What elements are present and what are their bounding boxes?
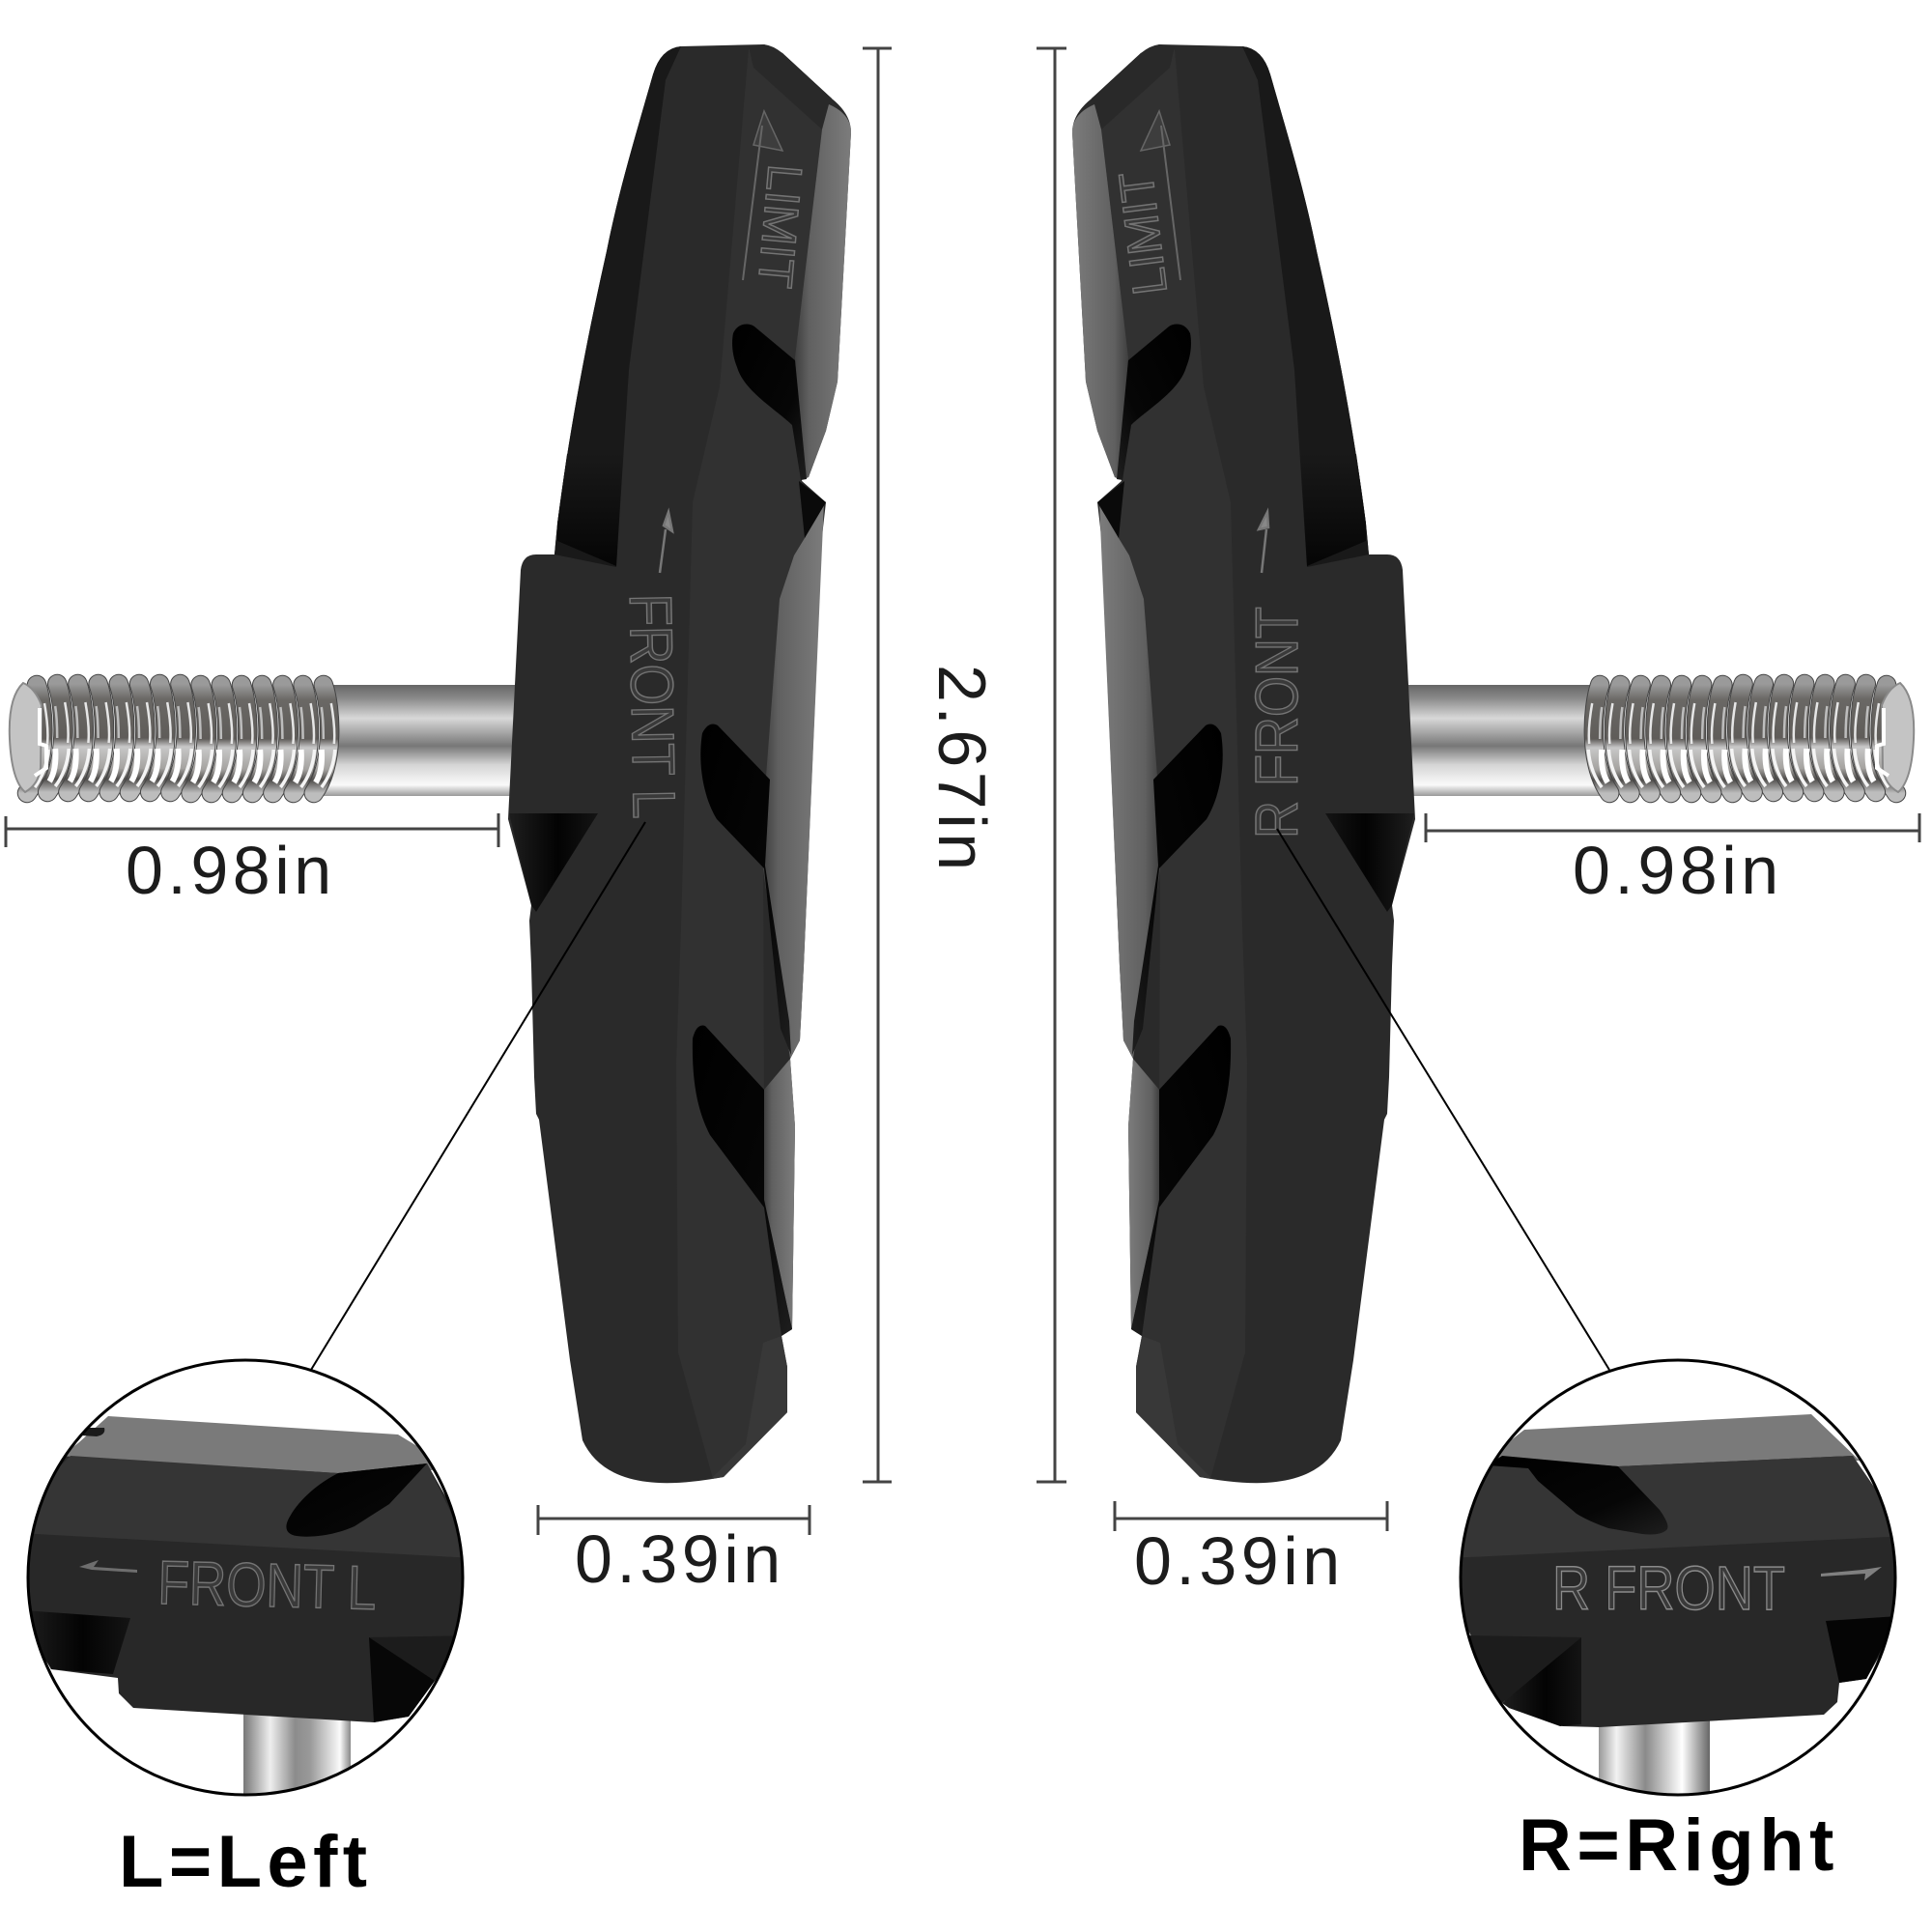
upper dark wedge <box>557 454 623 566</box>
right inset lighter band <box>1449 1456 1908 1558</box>
grey strip middle <box>763 502 824 1059</box>
dark left facet <box>554 46 681 567</box>
right inset left band dark <box>1468 1635 1581 1703</box>
slot three <box>693 1026 792 1336</box>
dimension: left height <box>863 48 892 1482</box>
embossed label: left FRONT L: FRONT L <box>616 593 687 819</box>
grey strip top <box>795 104 851 477</box>
leader line right <box>1277 829 1609 1370</box>
right inset right corner <box>1826 1617 1890 1683</box>
label: left width 0.39in: 0.39in <box>575 1521 785 1597</box>
embossed label: left LIMIT: LIMIT <box>748 162 812 290</box>
left brake pad with bolt <box>10 44 851 1483</box>
smooth shaft <box>324 685 519 796</box>
inset arrow left <box>79 1560 137 1573</box>
dimension: left bolt length <box>6 813 498 847</box>
right inset slot <box>1488 1456 1667 1534</box>
slot two <box>700 724 791 1055</box>
slot one <box>732 325 807 480</box>
top chamfer <box>749 44 832 129</box>
right inset grey band <box>1488 1414 1860 1468</box>
inset text R FRONT: R FRONT <box>1552 1553 1785 1623</box>
left inset dark corner <box>24 1610 130 1674</box>
label: right width 0.39in: 0.39in <box>1134 1523 1345 1599</box>
lower chamfer <box>711 1336 787 1479</box>
right inset body <box>1449 1456 1908 1727</box>
left inset right corner upper <box>369 1636 453 1681</box>
threaded bolt <box>10 683 335 793</box>
leader line left <box>311 822 645 1370</box>
small slot mark <box>81 1428 104 1436</box>
limit arrow <box>743 111 782 280</box>
lighter middle facet <box>676 49 832 1479</box>
right inset left corner <box>1502 1637 1581 1726</box>
dimension: right bolt length <box>1426 813 1919 842</box>
caption: L=Left: L=Left <box>119 1821 373 1903</box>
left inset slot <box>286 1463 427 1537</box>
left inset lighter band <box>19 1456 473 1558</box>
embossed label: right LIMIT: LIMIT <box>1109 169 1178 298</box>
label: right bolt 0.98in: 0.98in <box>1573 833 1783 908</box>
label: height 2.67in: 2.67in <box>924 665 1000 875</box>
left inset grey band <box>67 1416 433 1473</box>
magnifier circle: left <box>19 1360 473 1802</box>
dimension: right width <box>1115 1501 1387 1531</box>
embossed arrow: right front <box>1259 512 1268 573</box>
caption: R=Right: R=Right <box>1519 1804 1839 1887</box>
grey strip lower <box>764 1059 795 1329</box>
dimension: left width <box>538 1505 810 1535</box>
right brake pad with bolt <box>1072 44 1914 1483</box>
pad body <box>508 44 851 1483</box>
magnifier circle: right <box>1449 1360 1908 1802</box>
inset text FRONT L: FRONT L <box>157 1548 377 1623</box>
inset arrow right <box>1821 1567 1882 1580</box>
notch wedge <box>799 481 826 538</box>
embossed arrow: left front <box>660 512 672 573</box>
label: left bolt 0.98in: 0.98in <box>126 833 336 908</box>
lower dark wedge <box>509 813 598 912</box>
left inset right corner <box>369 1637 435 1722</box>
left inset bolt <box>243 1714 351 1793</box>
embossed label: right R FRONT: R FRONT <box>1244 607 1311 838</box>
right inset bolt <box>1599 1721 1710 1793</box>
dimension: right height <box>1037 48 1066 1482</box>
left inset body <box>19 1456 473 1722</box>
